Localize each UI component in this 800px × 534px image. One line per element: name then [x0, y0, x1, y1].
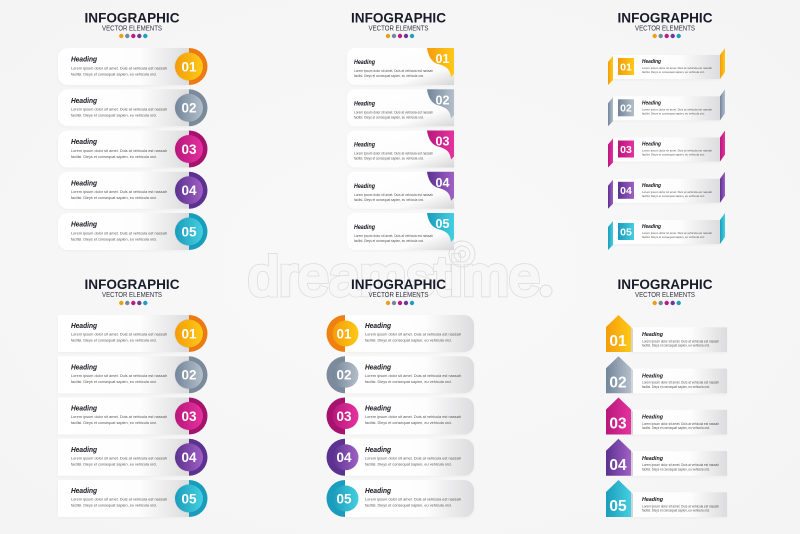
- row 03: Heading: [365, 406, 392, 412]
- row 04: [326, 439, 474, 476]
- row 02: 02: [181, 368, 197, 383]
- row 01: facilisi. Dieys et consequat sapien, eu vehicula orci.: [365, 338, 452, 342]
- row 02: Lorem ipsum dolor sit amet. Duis at vehicula est nassah: [354, 110, 433, 114]
- row 04: facilisi. Dieys et consequat sapien, eu vehicula orci.: [642, 467, 710, 471]
- row 01: Lorem ipsum dolor sit amet. Duis at vehicula est nassah: [365, 332, 461, 336]
- row 02: facilisi. Dieys et consequat sapien, eu vehicula orci.: [642, 111, 705, 115]
- row 02: [347, 89, 454, 126]
- row 05: facilisi. Dieys et consequat sapien, eu vehicula orci.: [354, 239, 424, 243]
- row 01: Lorem ipsum dolor sit amet. Duis at vehicula est nassah: [71, 332, 167, 336]
- row 01: facilisi. Dieys et consequat sapien, eu vehicula orci.: [354, 74, 424, 78]
- row 01: facilisi. Dieys et consequat sapien, eu vehicula orci.: [642, 344, 710, 348]
- row 03: [58, 130, 207, 168]
- row 01: Heading: [354, 60, 375, 66]
- row 04: facilisi. Dieys et consequat sapien, eu vehicula orci.: [642, 194, 705, 198]
- row 02: Heading: [71, 98, 98, 105]
- panel: bottom right infographic: [606, 276, 727, 517]
- row 05: Lorem ipsum dolor sit amet. Duis at vehicula est nassah: [642, 231, 712, 235]
- row 02: Lorem ipsum dolor sit amet. Duis at vehicula est nassah: [642, 381, 719, 385]
- row 05: Heading: [71, 222, 98, 228]
- row 03: Lorem ipsum dolor sit amet. Duis at vehicula est nassah: [354, 152, 433, 156]
- row 05: Heading: [642, 224, 662, 230]
- row 04: Lorem ipsum dolor sit amet. Duis at vehicula est nassah: [642, 190, 712, 194]
- row 05: Heading: [642, 497, 664, 503]
- row 04: facilisi. Dieys et consequat sapien, eu vehicula orci.: [71, 195, 157, 200]
- row 02: Lorem ipsum dolor sit amet. Duis at vehicula est nassah: [642, 107, 712, 111]
- row 05: 05: [609, 498, 627, 515]
- row 05: Lorem ipsum dolor sit amet. Duis at vehicula est nassah: [642, 504, 719, 508]
- row 03: 03: [181, 142, 197, 157]
- colour dots: [386, 301, 414, 305]
- row 02: Lorem ipsum dolor sit amet. Duis at vehicula est nassah: [365, 373, 461, 378]
- row 05: Lorem ipsum dolor sit amet. Duis at vehicula est nassah: [354, 234, 433, 238]
- row 04: 04: [620, 185, 632, 197]
- row 05: Lorem ipsum dolor sit amet. Duis at vehicula est nassah: [365, 496, 461, 502]
- subtitle: VECTOR ELEMENTS: [635, 292, 695, 299]
- title: INFOGRAPHIC: [351, 10, 446, 26]
- watermark: dreamstime: [248, 245, 540, 307]
- row 02: 02: [336, 368, 352, 383]
- row 03: 03: [620, 144, 632, 156]
- row 01: 01: [181, 59, 197, 74]
- row 03: facilisi. Dieys et consequat sapien, eu vehicula orci.: [642, 152, 705, 156]
- subtitle: VECTOR ELEMENTS: [102, 292, 162, 299]
- row 01: [326, 315, 474, 352]
- row 02: Heading: [365, 364, 392, 371]
- row 04: facilisi. Dieys et consequat sapien, eu vehicula orci.: [71, 461, 157, 466]
- row 01: Heading: [642, 59, 662, 65]
- row 01: [608, 48, 725, 85]
- row 01: Lorem ipsum dolor sit amet. Duis at vehicula est nassah: [642, 66, 712, 70]
- row 04: 04: [181, 183, 197, 198]
- row 04: Lorem ipsum dolor sit amet. Duis at vehicula est nassah: [71, 455, 167, 460]
- panel: bottom middle infographic: [326, 276, 474, 517]
- row 01: [58, 48, 207, 85]
- row 04: [58, 439, 208, 476]
- title: INFOGRAPHIC: [84, 276, 180, 292]
- row 03: Heading: [71, 406, 98, 412]
- row 04: Heading: [642, 456, 664, 462]
- watermark: dreamstime: [248, 245, 540, 307]
- row 04: facilisi. Dieys et consequat sapien, eu vehicula orci.: [365, 461, 452, 466]
- row 05: facilisi. Dieys et consequat sapien, eu vehicula orci.: [365, 502, 452, 508]
- row 03: [606, 398, 727, 434]
- row 05: [608, 213, 725, 250]
- row 04: [608, 172, 725, 209]
- row 05: facilisi. Dieys et consequat sapien, eu vehicula orci.: [71, 236, 157, 241]
- row 03: facilisi. Dieys et consequat sapien, eu vehicula orci.: [71, 420, 157, 425]
- row 05: Lorem ipsum dolor sit amet. Duis at vehicula est nassah: [71, 230, 167, 235]
- title: INFOGRAPHIC: [84, 10, 180, 26]
- row 01: [58, 315, 208, 352]
- row 01: Lorem ipsum dolor sit amet. Duis at vehicula est nassah: [71, 65, 167, 70]
- row 02: facilisi. Dieys et consequat sapien, eu vehicula orci.: [71, 113, 157, 118]
- row 01: 01: [336, 326, 352, 341]
- row 05: Heading: [365, 488, 392, 495]
- row 02: [608, 89, 725, 126]
- row 03: [347, 130, 454, 168]
- row 04: Heading: [71, 447, 98, 454]
- row 04: facilisi. Dieys et consequat sapien, eu vehicula orci.: [354, 198, 424, 202]
- row 04: Heading: [642, 183, 662, 189]
- panel: top left infographic: [58, 10, 207, 250]
- panel: top middle infographic: [347, 10, 454, 250]
- row 02: 02: [620, 103, 632, 115]
- row 02: [58, 89, 207, 126]
- row 05: 05: [336, 491, 352, 506]
- row 03: 03: [609, 416, 627, 432]
- row 03: Heading: [642, 414, 664, 420]
- row 04: Lorem ipsum dolor sit amet. Duis at vehicula est nassah: [365, 455, 461, 460]
- subtitle: VECTOR ELEMENTS: [102, 26, 162, 32]
- colour dots: [652, 34, 681, 38]
- row 01: Heading: [642, 332, 664, 338]
- row 03: facilisi. Dieys et consequat sapien, eu vehicula orci.: [365, 420, 452, 425]
- row 05: facilisi. Dieys et consequat sapien, eu vehicula orci.: [71, 502, 157, 508]
- row 04: Heading: [71, 180, 98, 187]
- row 01: 01: [181, 326, 197, 341]
- row 04: Lorem ipsum dolor sit amet. Duis at vehicula est nassah: [354, 193, 433, 197]
- row 03: Heading: [642, 142, 662, 148]
- panel: bottom left infographic: [58, 276, 208, 517]
- title: INFOGRAPHIC: [618, 276, 712, 292]
- subtitle: VECTOR ELEMENTS: [635, 26, 695, 32]
- row 05: 05: [620, 226, 632, 238]
- row 01: Heading: [71, 56, 98, 64]
- row 02: 02: [436, 93, 449, 107]
- row 03: 03: [181, 409, 197, 424]
- row 01: facilisi. Dieys et consequat sapien, eu vehicula orci.: [71, 338, 157, 342]
- row 04: [347, 172, 454, 209]
- row 01: Heading: [365, 323, 392, 330]
- row 03: Lorem ipsum dolor sit amet. Duis at vehicula est nassah: [642, 148, 712, 152]
- row 03: facilisi. Dieys et consequat sapien, eu vehicula orci.: [354, 156, 424, 160]
- row 01: [606, 315, 727, 352]
- colour dots: [386, 34, 414, 38]
- row 04: Heading: [354, 184, 375, 190]
- row 04: [606, 439, 727, 476]
- row 01: 01: [436, 52, 449, 66]
- row 03: Lorem ipsum dolor sit amet. Duis at vehicula est nassah: [642, 422, 719, 426]
- row 03: facilisi. Dieys et consequat sapien, eu vehicula orci.: [642, 426, 710, 430]
- row 01: Lorem ipsum dolor sit amet. Duis at vehicula est nassah: [354, 69, 433, 73]
- row 05: facilisi. Dieys et consequat sapien, eu vehicula orci.: [642, 508, 710, 512]
- row 01: 01: [609, 333, 627, 350]
- row 02: facilisi. Dieys et consequat sapien, eu vehicula orci.: [354, 115, 424, 119]
- row 02: facilisi. Dieys et consequat sapien, eu vehicula orci.: [365, 379, 452, 384]
- row 02: Lorem ipsum dolor sit amet. Duis at vehicula est nassah: [71, 373, 167, 378]
- row 03: 03: [436, 134, 449, 148]
- row 01: [347, 48, 454, 85]
- title: INFOGRAPHIC: [351, 276, 446, 292]
- row 01: Heading: [71, 323, 98, 330]
- row 05: Heading: [71, 488, 98, 495]
- row 05: [347, 213, 454, 250]
- row 02: [326, 356, 474, 393]
- row 03: facilisi. Dieys et consequat sapien, eu vehicula orci.: [71, 154, 157, 159]
- row 05: Lorem ipsum dolor sit amet. Duis at vehicula est nassah: [71, 496, 167, 502]
- row 03: Lorem ipsum dolor sit amet. Duis at vehicula est nassah: [365, 414, 461, 419]
- row 03: [58, 398, 208, 434]
- row 02: 02: [609, 374, 627, 391]
- row 03: Heading: [354, 142, 375, 148]
- row 03: 03: [336, 409, 352, 424]
- row 04: Lorem ipsum dolor sit amet. Duis at vehicula est nassah: [71, 189, 167, 194]
- row 05: [58, 480, 208, 517]
- row 01: 01: [620, 61, 632, 73]
- row 04: Lorem ipsum dolor sit amet. Duis at vehicula est nassah: [642, 463, 719, 467]
- row 04: 04: [436, 176, 449, 190]
- row 02: 02: [181, 101, 197, 116]
- row 01: facilisi. Dieys et consequat sapien, eu vehicula orci.: [642, 70, 705, 74]
- row 03: Heading: [71, 139, 98, 146]
- row 02: [606, 356, 727, 393]
- row 04: 04: [336, 450, 352, 465]
- colour dots: [119, 301, 148, 305]
- row 05: 05: [181, 224, 197, 239]
- row 01: Lorem ipsum dolor sit amet. Duis at vehicula est nassah: [642, 339, 719, 343]
- row 02: facilisi. Dieys et consequat sapien, eu vehicula orci.: [71, 379, 157, 384]
- colour dots: [652, 301, 681, 305]
- row 02: Heading: [71, 364, 98, 371]
- subtitle: VECTOR ELEMENTS: [368, 292, 429, 299]
- row 03: Lorem ipsum dolor sit amet. Duis at vehicula est nassah: [71, 414, 167, 419]
- subtitle: VECTOR ELEMENTS: [368, 26, 429, 32]
- row 04: Heading: [365, 447, 392, 454]
- row 05: Heading: [354, 225, 375, 231]
- row 02: facilisi. Dieys et consequat sapien, eu vehicula orci.: [642, 385, 710, 389]
- row 05: [606, 480, 727, 517]
- row 02: Heading: [642, 373, 664, 379]
- colour dots: [119, 34, 148, 38]
- row 05: [58, 213, 207, 250]
- row 03: [608, 130, 725, 168]
- row 02: Heading: [642, 100, 662, 106]
- row 01: facilisi. Dieys et consequat sapien, eu vehicula orci.: [71, 71, 157, 76]
- row 02: Lorem ipsum dolor sit amet. Duis at vehicula est nassah: [71, 107, 167, 112]
- row 03: Lorem ipsum dolor sit amet. Duis at vehicula est nassah: [71, 148, 167, 153]
- row 05: 05: [436, 217, 449, 231]
- panel: top right infographic: [608, 10, 725, 250]
- row 04: [58, 172, 207, 209]
- row 05: [326, 480, 474, 517]
- row 04: 04: [181, 450, 197, 465]
- row 05: 05: [181, 491, 197, 506]
- row 03: [326, 398, 474, 434]
- row 02: Heading: [354, 101, 375, 107]
- row 02: [58, 356, 208, 393]
- title: INFOGRAPHIC: [618, 10, 712, 26]
- row 05: facilisi. Dieys et consequat sapien, eu vehicula orci.: [642, 235, 705, 239]
- row 04: 04: [609, 457, 627, 474]
